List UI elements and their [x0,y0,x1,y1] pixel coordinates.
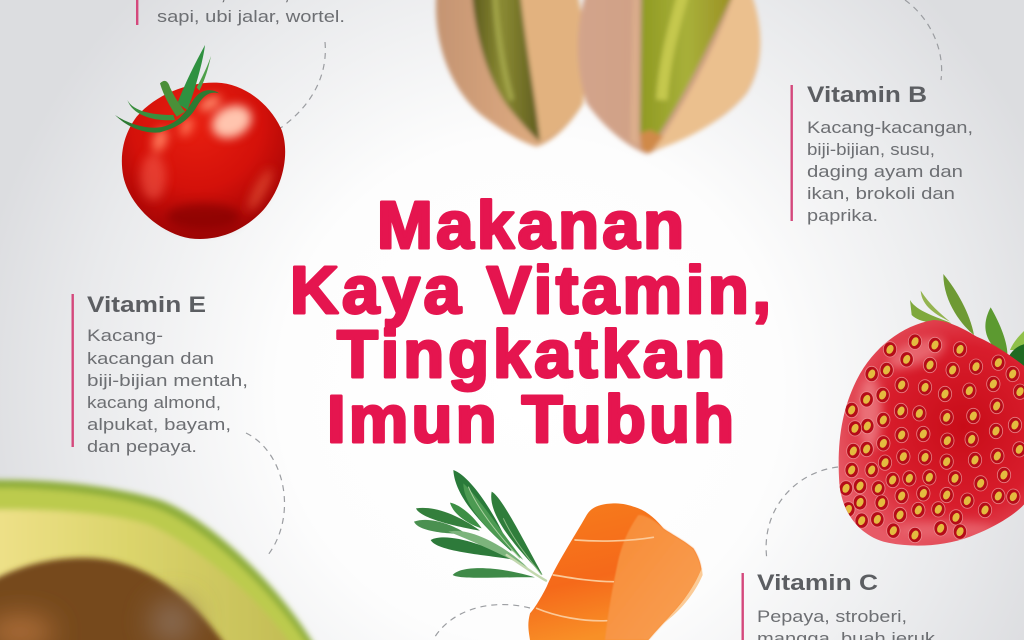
body text: Kacang- [87,327,163,345]
icon: tomato [115,45,285,239]
text block: vitamin A [136,0,345,26]
text block: vitamin C [742,570,936,640]
body text: sapi, ubi jalar, wortel. [157,8,345,26]
salmon side [605,515,702,640]
title [290,188,771,457]
avocado skin and flesh [0,480,320,640]
title: Tingkatkan [337,317,725,392]
body text: alpukat, bayam, [87,416,231,434]
title: Kaya Vitamin, [290,253,771,328]
leaves [910,274,1024,377]
body text: kacang almond, [87,394,221,412]
body text: Kacang-kacangan, [807,119,973,137]
body text: Pepaya, stroberi, [757,608,907,626]
fat lines [537,537,653,621]
gloss [858,332,997,539]
dashed connector: vitamin B to pistachio [905,0,942,80]
title: Makanan [377,188,684,263]
icon: strawberry [839,274,1024,546]
accent bar [136,0,138,25]
dashed connector: vitamin C to strawberry [766,467,838,560]
body text: kacangan dan [87,350,214,368]
accent bar [742,573,744,640]
accent bar [790,85,793,221]
icon: avocado [0,480,320,640]
text block: vitamin B [790,82,973,225]
heading: Vitamin E [87,292,206,317]
pale fat edge [663,568,703,623]
calyx and stem [115,45,219,133]
accent bar [72,294,74,447]
icon: pistachios [436,0,760,154]
body text: dan pepaya. [87,438,197,456]
right pistachio [578,0,760,154]
avocado pit [0,558,232,640]
body text: daging ayam dan [807,163,963,181]
salmon flesh [528,503,702,640]
body text: biji-bijian, susu, [807,141,935,159]
berry body [839,320,1024,546]
tomato body [122,83,285,239]
heading: Vitamin B [807,82,927,107]
body text: ikan, brokoli dan [807,185,955,203]
dashed connector: salmon [433,605,530,640]
seeds [839,334,1024,543]
dashed connector: vitamin A to tomato [245,42,325,139]
title: Imun Tubuh [327,382,734,457]
left pistachio [436,0,585,147]
body text: biji-bijian mentah, [87,372,248,390]
dashed connector: vitamin E to avocado [246,433,285,555]
text block: vitamin E [72,292,248,456]
highlights [141,93,276,230]
body text: paprika. [807,207,878,225]
heading: Vitamin C [757,570,878,595]
rosemary sprig [414,470,546,581]
icon: salmon with rosemary [414,470,703,640]
